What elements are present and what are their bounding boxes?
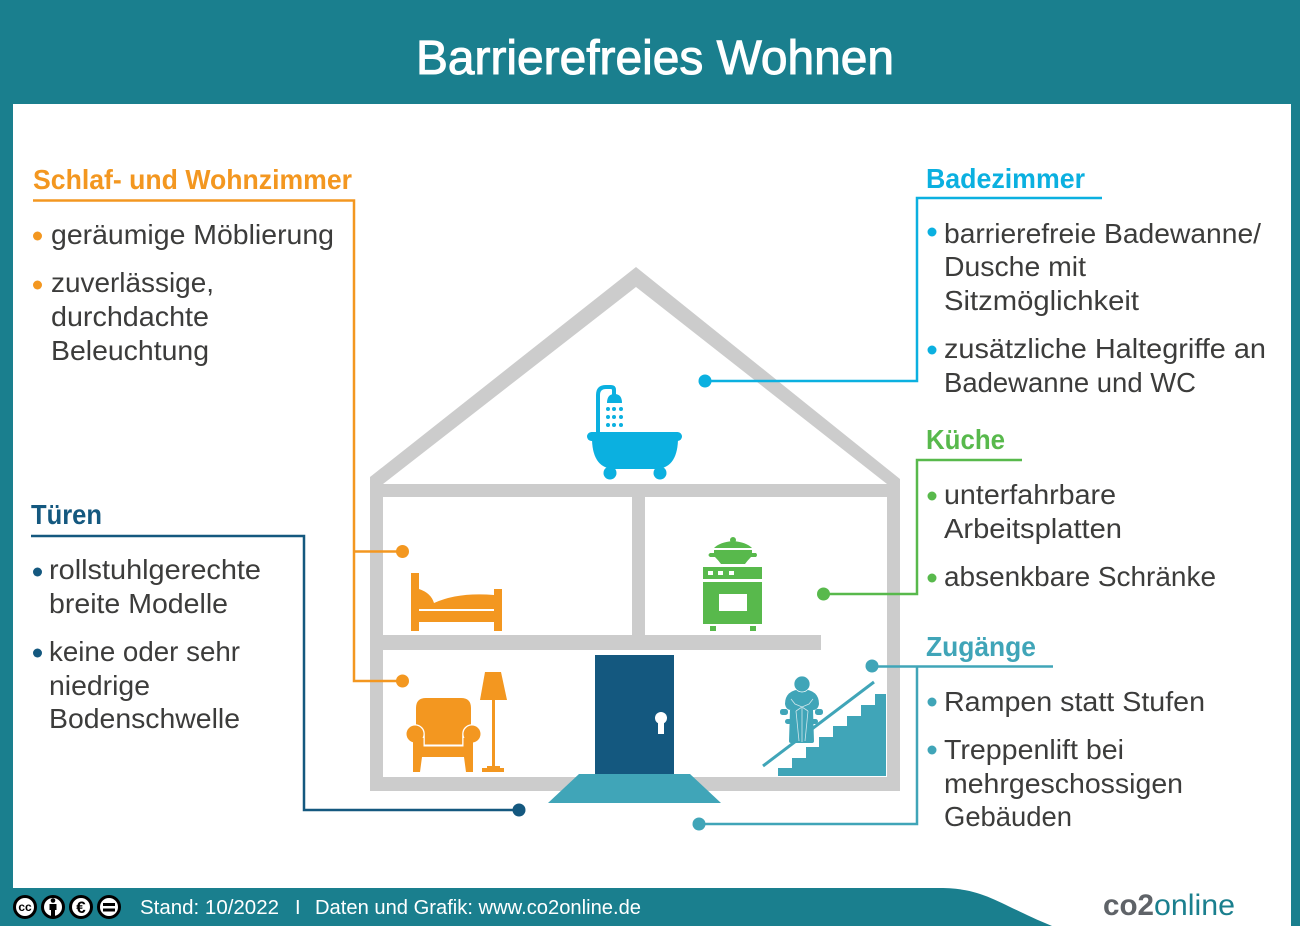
bullet list bbox=[928, 479, 1216, 592]
logo: co2online: online bbox=[1154, 889, 1235, 922]
heading: Zugänge: Zugänge bbox=[926, 631, 1036, 662]
bullet list: zuverlässige, bbox=[51, 267, 214, 298]
heading: Küche: Küche bbox=[926, 424, 1005, 455]
panel: Zugänge bbox=[692, 631, 1205, 832]
bullet list: keine oder sehr bbox=[49, 636, 240, 667]
bullet list: Treppenlift bei bbox=[944, 734, 1124, 765]
footer: licence icons bbox=[14, 896, 120, 918]
footer: source text: Stand: 10/2022 bbox=[140, 897, 279, 919]
footer: source text: I bbox=[295, 897, 301, 919]
bullet list: niedrige bbox=[49, 670, 150, 701]
bullet list: Beleuchtung bbox=[51, 335, 209, 366]
connector: kitchen bbox=[817, 460, 1022, 600]
icon: bathtub with shower bbox=[587, 387, 682, 480]
title: Barrierefreies Wohnen bbox=[416, 32, 894, 85]
footer: source text: Daten und Grafik: www.co2online.de bbox=[315, 897, 641, 919]
bullet list: Dusche mit bbox=[944, 251, 1086, 282]
connector: bathroom bbox=[698, 198, 1102, 388]
bullet list: Sitzmöglichkeit bbox=[944, 285, 1139, 316]
bullet list: Arbeitsplatten bbox=[944, 513, 1122, 544]
connector: access bbox=[692, 660, 1053, 830]
panel: Badezimmer bbox=[698, 163, 1266, 398]
logo: co2online bbox=[1103, 889, 1235, 922]
bullet list bbox=[33, 554, 261, 734]
bullet list: geräumige Möblierung bbox=[51, 219, 334, 250]
bullet list bbox=[33, 219, 334, 366]
icon: floor lamp bbox=[480, 672, 507, 772]
icon: door with keyhole bbox=[595, 655, 674, 775]
panel: Schlaf- und Wohnzimmer bbox=[33, 164, 409, 688]
heading: Türen: Türen bbox=[31, 499, 102, 530]
bullet list: barrierefreie Badewanne/ bbox=[944, 218, 1261, 249]
bullet list: Rampen statt Stufen bbox=[944, 686, 1205, 717]
panel: Küche bbox=[817, 424, 1216, 600]
heading: Badezimmer: Badezimmer bbox=[926, 163, 1085, 194]
heading: Schlaf- und Wohnzimmer: Schlaf- und Wohnzimmer bbox=[33, 164, 352, 195]
icon: stove with pot bbox=[703, 537, 762, 631]
bullet list: Badewanne und WC bbox=[944, 367, 1196, 398]
icon: bed bbox=[411, 573, 502, 631]
panel: Türen bbox=[31, 499, 526, 816]
logo: co2online: co2 bbox=[1103, 889, 1154, 922]
connector: bedroom and living room bbox=[33, 200, 409, 688]
house outline bbox=[370, 267, 900, 791]
bullet list: absenkbare Schränke bbox=[944, 561, 1216, 592]
footer: licence icons: cc bbox=[18, 900, 32, 914]
bullet list: unterfahrbare bbox=[944, 479, 1116, 510]
footer: licence icons: € bbox=[76, 898, 86, 917]
bullet list: Bodenschwelle bbox=[49, 703, 240, 734]
bullet list: Gebäuden bbox=[944, 801, 1072, 832]
bullet list: zusätzliche Haltegriffe an bbox=[944, 333, 1266, 364]
icon: stairlift and stairs bbox=[763, 676, 886, 776]
bullet list bbox=[928, 686, 1205, 832]
connector: doors bbox=[31, 536, 526, 816]
icon: armchair bbox=[406, 698, 480, 772]
bullet list: mehrgeschossigen bbox=[944, 768, 1183, 799]
bullet list: durchdachte bbox=[51, 301, 209, 332]
icon: entrance ramp bbox=[548, 774, 721, 803]
bullet list bbox=[928, 218, 1266, 398]
bullet list: breite Modelle bbox=[49, 588, 228, 619]
bullet list: rollstuhlgerechte bbox=[49, 554, 261, 585]
footer: source text bbox=[140, 897, 641, 919]
